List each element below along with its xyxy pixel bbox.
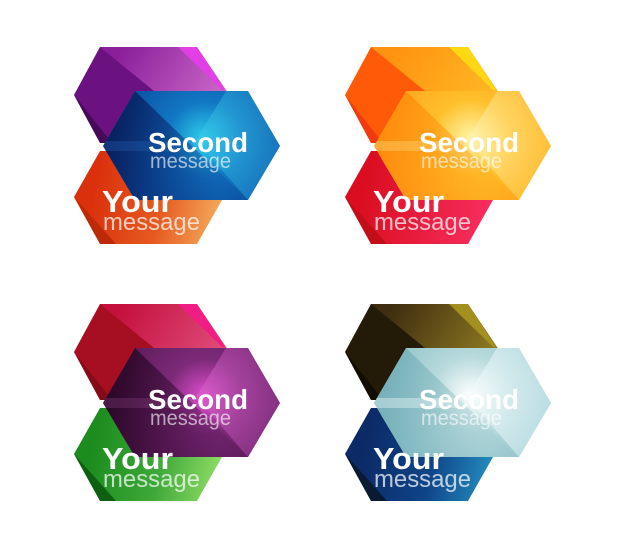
- text: Second message: message: [421, 407, 502, 430]
- text: Your message: Your: [102, 184, 173, 219]
- top hexagon: [74, 304, 227, 400]
- text: Your message: [373, 441, 471, 493]
- top hexagon: [345, 47, 498, 143]
- text: Your message: message: [374, 209, 471, 236]
- text: Your message: message: [103, 209, 200, 236]
- top hexagon: [74, 47, 227, 143]
- text: Second message: Second: [419, 384, 519, 415]
- middle hexagon: [371, 347, 553, 459]
- text: Your message: [373, 184, 471, 236]
- text: Your message: [102, 441, 200, 493]
- text: Second message: [419, 384, 519, 430]
- bottom hexagon: [70, 407, 230, 502]
- text: Second message: Second: [148, 384, 248, 415]
- top hexagon: [345, 304, 498, 400]
- panel: crimson magenta green hexagon banner: [70, 302, 282, 502]
- bottom hexagon: [341, 150, 501, 245]
- panel: purple blue orange hexagon banner: [70, 45, 282, 245]
- text: Your message: Your: [102, 441, 173, 476]
- text: Your message: message: [103, 466, 200, 493]
- text: Second message: message: [150, 150, 231, 173]
- bottom hexagon: [341, 407, 501, 502]
- text: Your message: Your: [373, 184, 444, 219]
- text: Your message: Your: [373, 441, 444, 476]
- bottom hexagon: [70, 150, 230, 245]
- panel: orange yellow red hexagon banner: [341, 45, 553, 245]
- middle hexagon: [371, 90, 553, 202]
- text: Second message: message: [150, 407, 231, 430]
- middle hexagon: [100, 347, 282, 459]
- text: Second message: [148, 127, 248, 173]
- text: Second message: [419, 127, 519, 173]
- text: Your message: message: [374, 466, 471, 493]
- text: Second message: message: [421, 150, 502, 173]
- panel: olive teal navy hexagon banner: [341, 302, 553, 502]
- text: Second message: Second: [148, 127, 248, 158]
- middle hexagon: [100, 90, 282, 202]
- text: Your message: [102, 184, 200, 236]
- text: Second message: Second: [419, 127, 519, 158]
- text: Second message: [148, 384, 248, 430]
